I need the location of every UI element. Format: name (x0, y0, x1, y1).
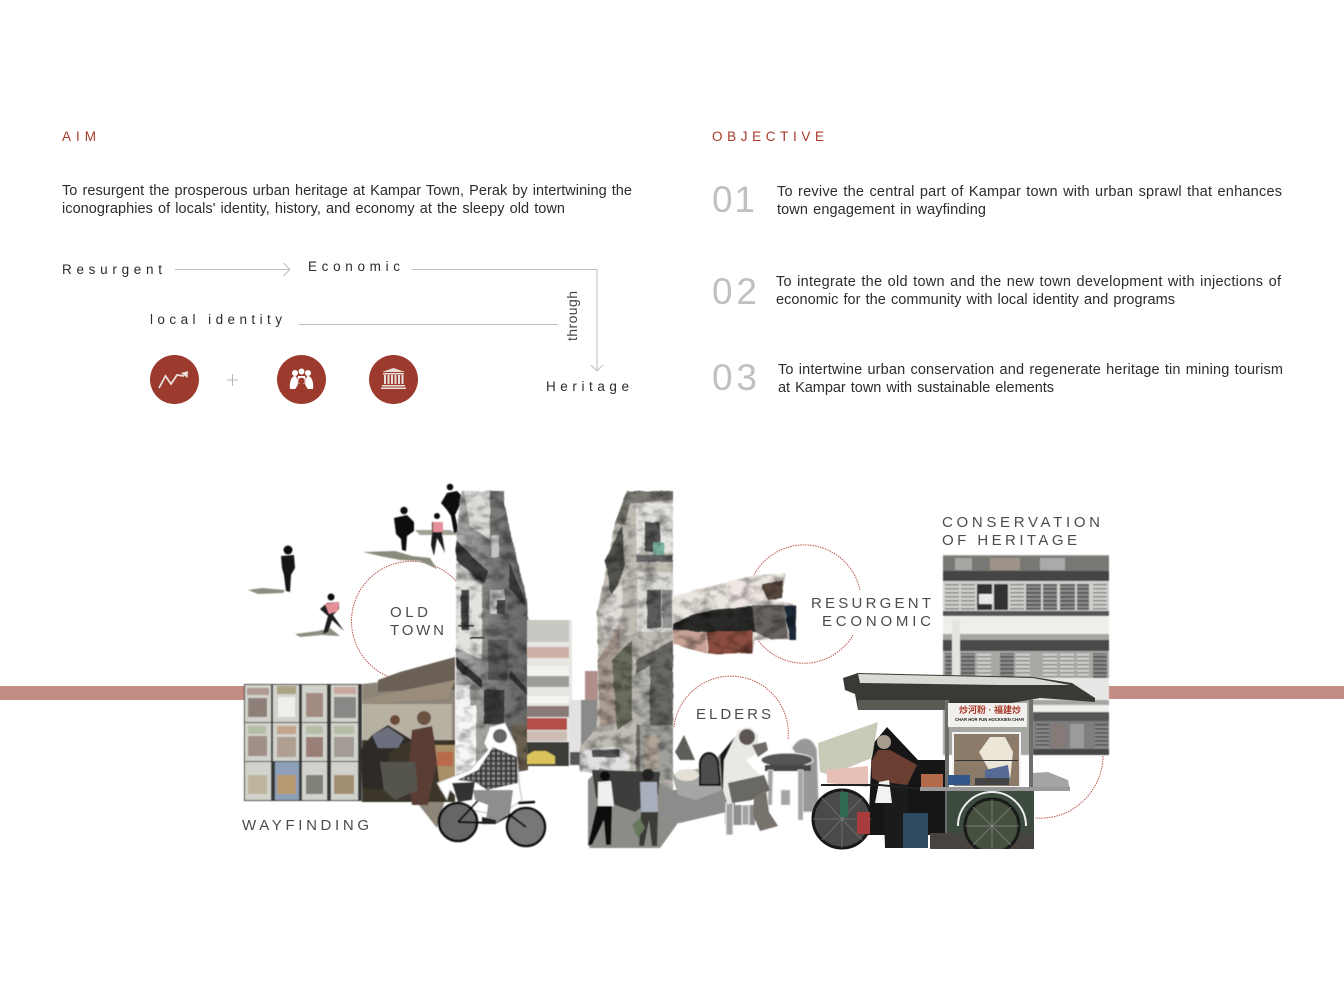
label: heritage: Heritage (546, 379, 629, 394)
icon: heritage building (369, 355, 418, 404)
basket (452, 782, 475, 802)
label: resurgent: Resurgent (62, 262, 162, 277)
objective 01: 01 (712, 179, 755, 220)
dotted circle: resurgent economic (754, 545, 860, 663)
collage: market stall photo (360, 657, 455, 828)
objective 03 (712, 357, 1283, 398)
tail tray (1033, 772, 1070, 790)
band: left pink strip (0, 686, 246, 700)
collage: food cart with vendor (813, 673, 1095, 855)
connector: local identity line (299, 324, 558, 326)
caption: resurgent economic: ECONOMIC (822, 613, 931, 630)
figure: child five (441, 484, 471, 533)
collage: central tenement building (580, 491, 673, 790)
collage: elders on stools (660, 727, 819, 835)
arrow: economic to heritage (412, 270, 603, 371)
text block: aim statement: To resurgent the prosperous urban heritage at Kampar Town, Perak by intertwining the (62, 183, 632, 199)
figure: child three (363, 507, 460, 569)
objective 03: 03 (712, 357, 757, 398)
objective 02: economic for the community with local identity and programs (776, 292, 1175, 308)
dotted circle: conservation of heritage (1035, 756, 1103, 818)
objective 02 (712, 271, 1282, 312)
caption: conservation of heritage: OF HERITAGE (942, 532, 1077, 549)
label: economic: Economic (308, 259, 400, 274)
objective 03: at Kampar town with sustainable elements (778, 380, 1054, 396)
glass case (953, 733, 1020, 787)
heading: objective: OBJECTIVE (712, 129, 824, 144)
counter (920, 787, 1070, 791)
collage: left tenement building (456, 491, 528, 790)
label: local identity: local identity (150, 312, 282, 327)
sign with dish names (948, 703, 1027, 727)
dotted circle: old town (352, 561, 456, 678)
figure: child four (431, 513, 445, 556)
collage: conservation building facade (943, 555, 1109, 755)
right wheel (958, 792, 1026, 853)
caption: elders: ELDERS (696, 706, 771, 723)
objective 03: To intertwine urban conservation and regenerate heritage tin mining tourism (778, 362, 1283, 378)
bicycle wheels (439, 790, 545, 846)
caption: resurgent economic: RESURGENT (811, 595, 931, 612)
collage: wayfinding map panels (244, 684, 362, 801)
vendor (871, 735, 917, 848)
heading: aim: AIM (62, 129, 96, 144)
collage: cyclist (437, 723, 545, 846)
text block: aim statement: iconographies of locals' identity, history, and economy at the sleepy old town (62, 201, 565, 217)
caption: old town: TOWN (390, 622, 444, 639)
plus sign (227, 374, 238, 386)
cart backdrop (868, 727, 945, 835)
caption: old town (390, 604, 444, 639)
caption: resurgent economic (811, 595, 931, 630)
collage: distant street buildings (527, 620, 599, 766)
diagram: resurgent economic local identity through heritage (62, 259, 629, 404)
roof (843, 673, 1095, 710)
objective 01 (712, 179, 1282, 220)
objective 01: To revive the central part of Kampar town with urban sprawl that enhances (777, 184, 1282, 200)
objective 02: 02 (712, 271, 757, 312)
figure: child two (295, 594, 344, 637)
dotted circle: elders (674, 676, 788, 740)
crate (827, 766, 868, 787)
caption: wayfinding: WAYFINDING (242, 817, 369, 834)
sign with dish names: 炒河粉 · 福建炒 (959, 704, 1021, 715)
band: right pink strip (1108, 686, 1344, 699)
caption: conservation of heritage: CONSERVATION (942, 514, 1100, 531)
collage: running children silhouettes (248, 484, 471, 637)
icon: local community people (277, 355, 326, 404)
sign with dish names: CHAR HOR FUN HOCKKIEN CHAR (955, 717, 1024, 722)
objective 02: To integrate the old town and the new town development with injections of (776, 274, 1282, 290)
barrel (903, 813, 928, 848)
caption: old town: OLD (390, 604, 428, 621)
collage: street pedestrians photo (588, 768, 678, 848)
left wheel (813, 785, 930, 848)
tarp (818, 722, 878, 775)
text block: aim statement (62, 183, 632, 217)
poles (945, 700, 1033, 835)
figure: child one (248, 546, 295, 594)
cart base (947, 791, 1034, 833)
label: through: through (564, 291, 580, 341)
arrow: resurgent to economic (175, 263, 290, 276)
rider (457, 729, 518, 824)
objective 01: town engagement in wayfinding (777, 202, 986, 218)
icon: economy growth chart (150, 355, 199, 404)
caption: conservation of heritage (942, 514, 1100, 549)
collage: hanging laundry (673, 573, 797, 654)
